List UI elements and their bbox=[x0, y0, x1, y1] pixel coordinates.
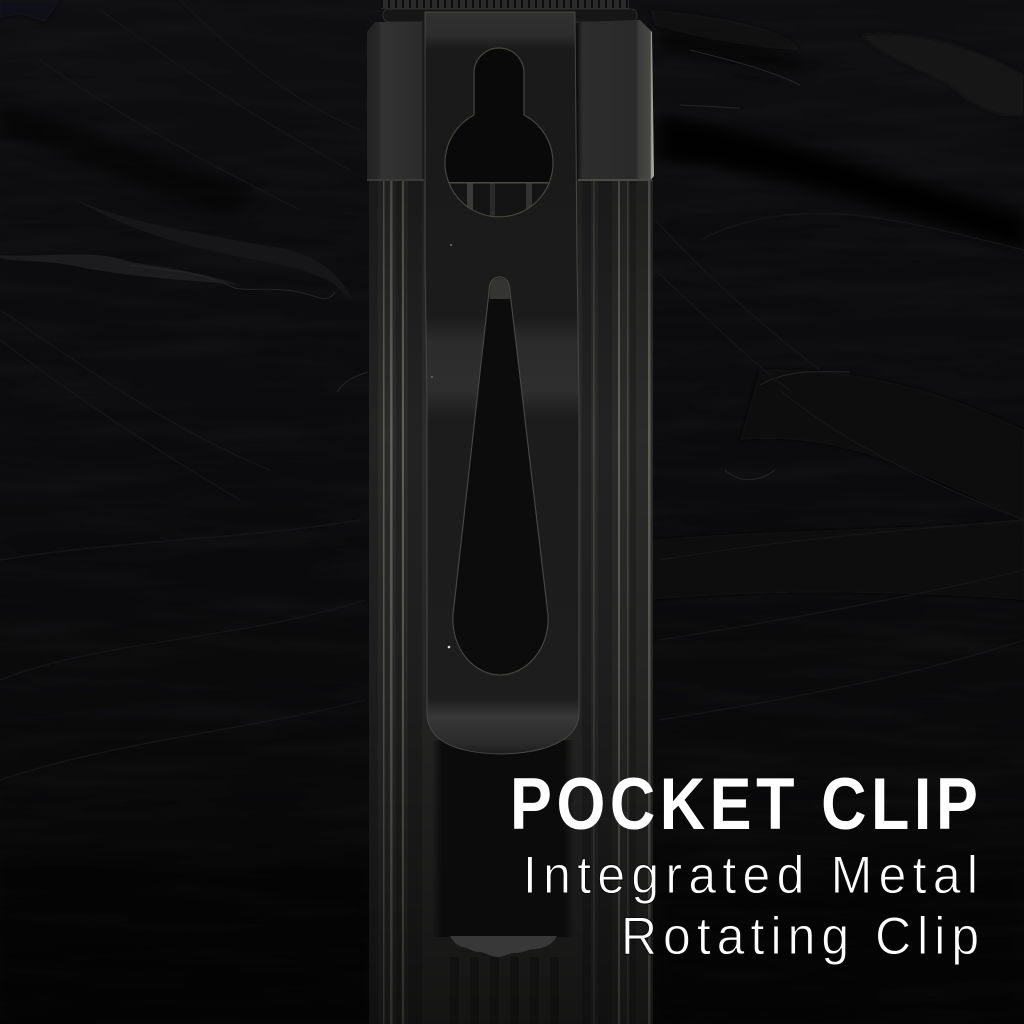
heading: POCKET CLIP bbox=[510, 764, 978, 845]
text block bbox=[510, 764, 979, 965]
grooved lower body bbox=[369, 180, 653, 1024]
flashlight body bbox=[367, 0, 654, 1024]
end cap collar bbox=[381, 0, 637, 22]
pocket clip bbox=[425, 12, 579, 754]
keyhole opening bbox=[445, 48, 553, 218]
subtitle line 2: Rotating Clip bbox=[621, 906, 979, 965]
lower channel and notch bbox=[432, 740, 574, 1024]
subtitle line 1: Integrated Metal bbox=[523, 845, 978, 904]
teardrop cutout bbox=[453, 277, 548, 675]
cap section bbox=[367, 20, 654, 181]
